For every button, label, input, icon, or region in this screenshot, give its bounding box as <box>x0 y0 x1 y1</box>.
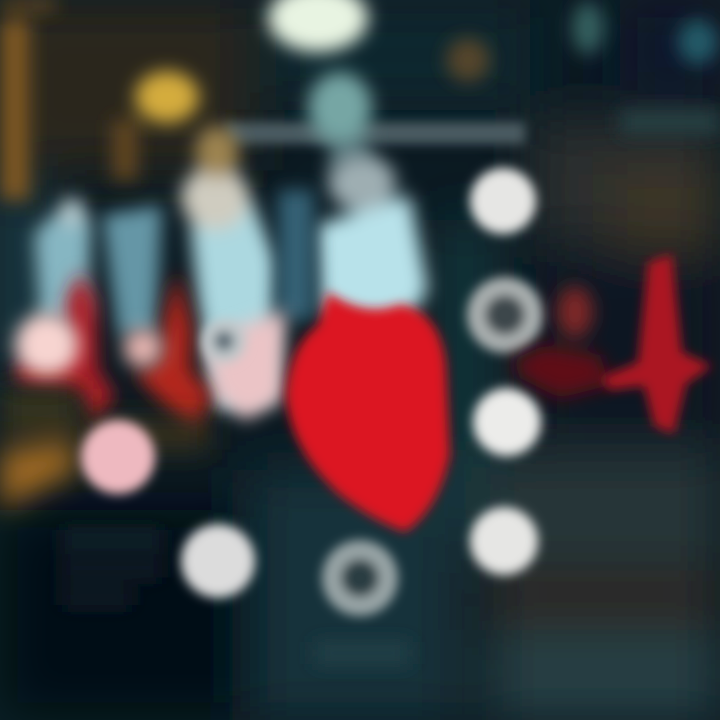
IV bag 1 <box>34 198 92 320</box>
heart <box>286 292 450 532</box>
IV bag 4 <box>316 155 428 340</box>
circle: right column 1 <box>470 168 536 234</box>
lamp: top white glow <box>268 0 368 52</box>
lamp: yellow <box>112 71 199 180</box>
circle: ring under heart <box>322 540 398 616</box>
text block: blurred below heart <box>315 642 410 664</box>
circle: right column 3 <box>473 388 541 456</box>
lamp: left brown column <box>0 0 56 200</box>
ECG bright spike <box>600 254 712 434</box>
circle: ring on bag <box>202 319 246 363</box>
ECG line <box>512 254 712 434</box>
red spikes left <box>14 272 212 432</box>
floor: amber <box>0 390 210 510</box>
horizontal rail <box>225 122 525 144</box>
text block: blurred lower left <box>62 530 162 606</box>
pink fluid lower bag <box>205 310 285 420</box>
circle: pink left <box>15 313 163 377</box>
lamp: small amber <box>446 2 720 134</box>
IV bag 3 <box>181 126 276 410</box>
IV bag 2 <box>102 205 162 335</box>
circle: right column 2 ring <box>467 277 543 353</box>
circle: white lower <box>181 524 255 598</box>
teal stand <box>308 72 372 170</box>
circle: right column 4 <box>470 507 538 575</box>
circle: pink lower left <box>81 420 155 494</box>
ECG dark red segment <box>512 286 610 398</box>
IV bags <box>34 126 428 410</box>
